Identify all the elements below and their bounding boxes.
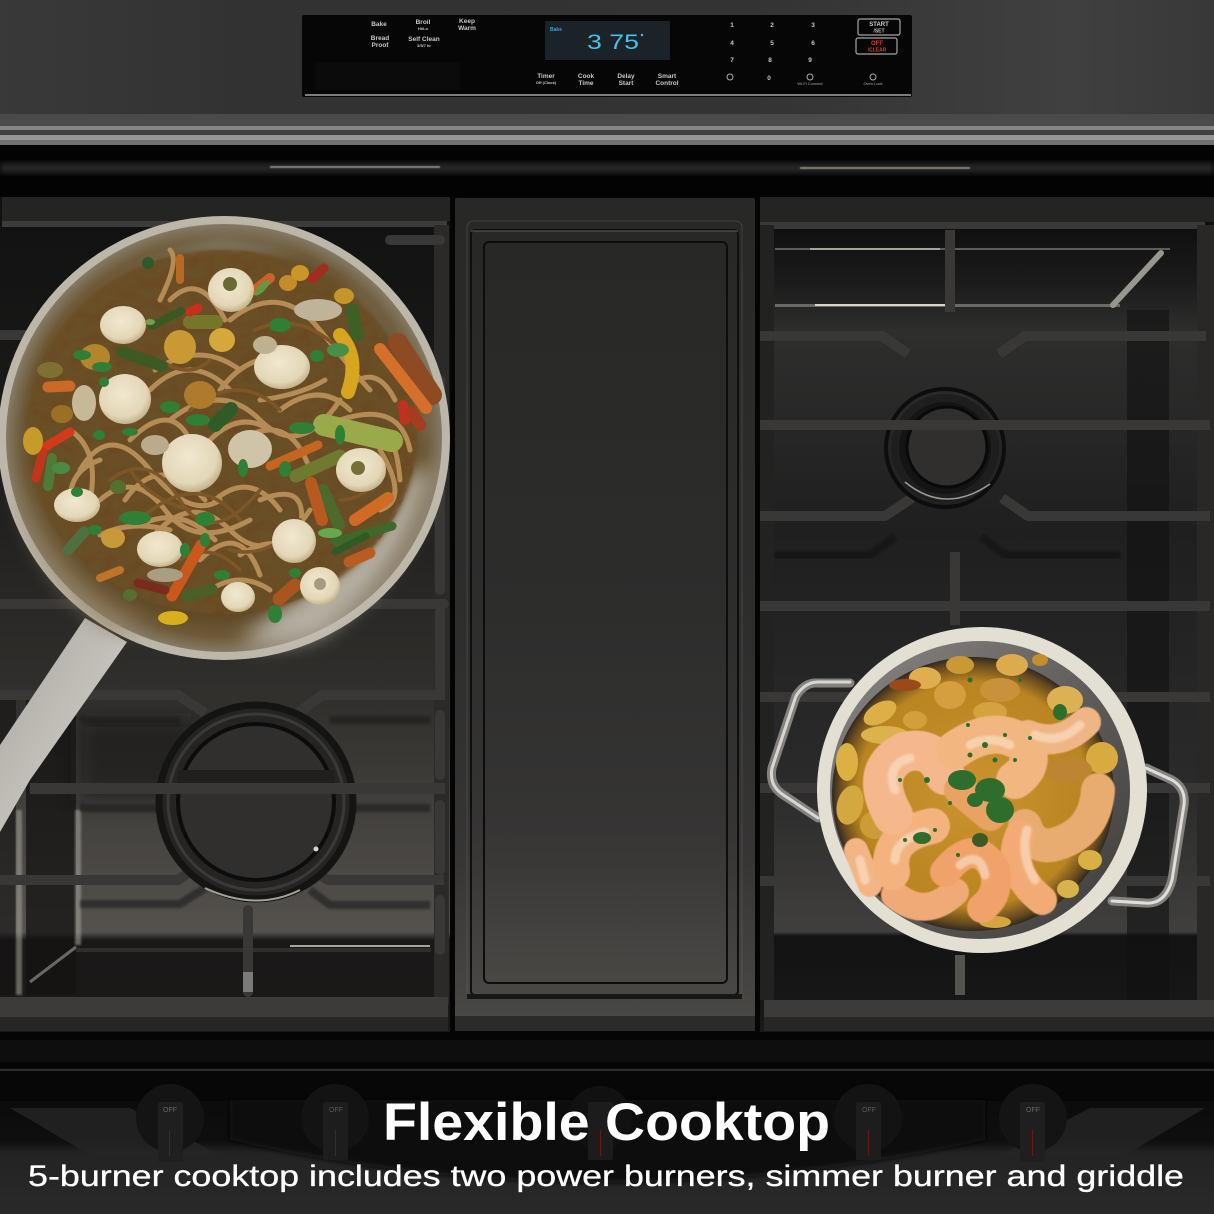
off button (856, 38, 897, 54)
control panel (302, 15, 912, 97)
griddle (455, 198, 755, 1031)
shadow bars (775, 537, 1120, 555)
knob 4 (834, 1084, 902, 1160)
off button: /CLEAR (868, 48, 887, 54)
frying pan (0, 216, 450, 832)
control panel: 2 (770, 22, 774, 29)
control panel: Keep (459, 18, 475, 25)
pan handle (0, 618, 127, 832)
range front rail (0, 1032, 1214, 1068)
vegetables (36, 258, 432, 599)
pot handles (771, 682, 1184, 903)
oven display: 3 75 (587, 31, 639, 54)
control panel: Self Clean (408, 36, 440, 43)
control panel: 7 (730, 57, 734, 64)
control panel: 6 (811, 40, 815, 47)
control panel: Off (Clock) (536, 80, 557, 85)
knob 1: OFF (163, 1107, 177, 1114)
control panel: Proof (372, 42, 389, 49)
right simmer burner (886, 389, 1004, 507)
scallops (54, 268, 386, 612)
shrimp (856, 722, 1098, 908)
knob 1 (136, 1084, 204, 1162)
control panel: Wi-Fi Connect (797, 81, 824, 86)
start button: START (869, 22, 889, 28)
title: Flexible Cooktop (383, 1093, 830, 1152)
bar shadows (80, 720, 430, 905)
control panel: Warm (458, 25, 476, 32)
control panel: 4 (730, 40, 734, 47)
control panel: Start (619, 80, 634, 87)
control panel: Cook (578, 73, 595, 80)
control panel: Timer (537, 73, 555, 80)
oven display: Bake (550, 27, 562, 33)
knob 2 (301, 1084, 369, 1160)
garlic pieces (832, 654, 1118, 928)
knob 3 (568, 1086, 632, 1160)
burner knobs strip (0, 1068, 1214, 1214)
off button: OFF (871, 41, 883, 47)
noodles (70, 250, 410, 590)
right grate bars (760, 230, 1210, 881)
control panel: Smart (658, 73, 677, 80)
control panel: Bread (371, 35, 389, 42)
left burner well (0, 197, 450, 1032)
knob 4: OFF (862, 1107, 876, 1114)
noodle base (27, 250, 417, 614)
control panel: Time (578, 80, 594, 87)
control panel: Delay (617, 73, 635, 80)
subtitle: 5-burner cooktop includes two power burners, simmer burner and griddle (28, 1160, 1184, 1193)
control panel: Oven Lock (863, 81, 883, 86)
parsley (898, 678, 1067, 857)
knob 5 (999, 1084, 1067, 1162)
herb leaves (52, 257, 349, 623)
control panel: Broil (416, 19, 431, 26)
left power burner (159, 705, 353, 901)
knob 5: OFF (1026, 1107, 1040, 1114)
control panel: Bake (371, 21, 387, 28)
control panel: Hi/Lo (418, 26, 429, 31)
control panel: 3 (811, 22, 815, 29)
knob 2: OFF (329, 1107, 343, 1114)
control panel: 5 (770, 40, 774, 47)
oven display (545, 21, 670, 60)
control panel: 1 (730, 22, 734, 29)
start button (858, 19, 900, 35)
control panel: 0 (767, 75, 771, 82)
left grate bars (0, 240, 445, 992)
control panel: Control (655, 80, 679, 87)
control panel: 8 (768, 57, 772, 64)
stainless back guard (0, 0, 1214, 197)
control panel: 9 (808, 57, 812, 64)
start button: /SET (873, 28, 885, 34)
steel reflections (15, 240, 430, 644)
stock pot (771, 627, 1184, 953)
control panel: 3/5/7 hr (417, 43, 431, 48)
right burner well (760, 197, 1214, 1032)
